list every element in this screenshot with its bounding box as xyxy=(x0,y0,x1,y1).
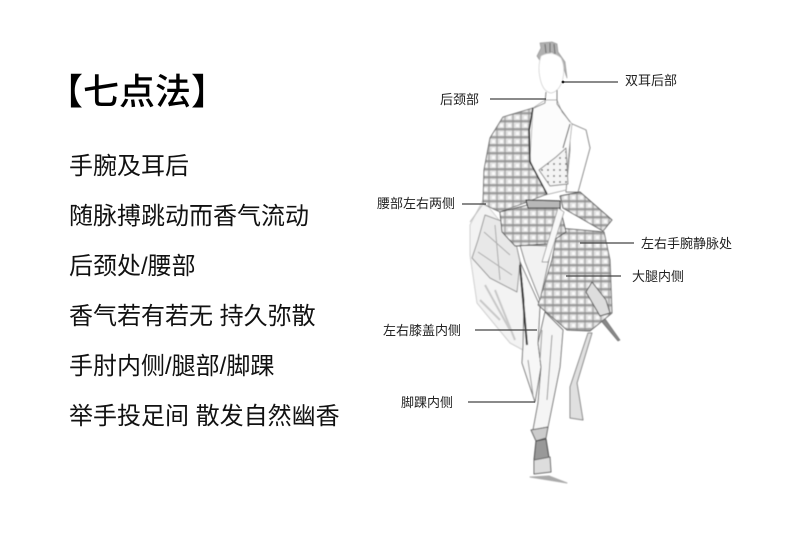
text line 5: 手肘内侧/腿部/脚踝 xyxy=(69,353,274,380)
neck xyxy=(534,90,570,122)
text line 4: 香气若有若无 持久弥散 xyxy=(69,303,316,330)
label: wrist veins: 左右手腕静脉处 xyxy=(641,236,732,251)
dotted top xyxy=(539,148,568,186)
boot xyxy=(531,427,548,441)
label: inner ankle xyxy=(401,395,535,410)
bare right arm xyxy=(566,123,590,192)
sole xyxy=(530,476,567,483)
label: behind both ears: 双耳后部 xyxy=(625,73,677,88)
text line 6: 举手投足间 散发自然幽香 xyxy=(69,403,340,430)
right sash xyxy=(560,192,612,231)
sheer drape folds xyxy=(480,285,515,340)
waist fold xyxy=(500,205,566,246)
belt tail xyxy=(597,313,620,341)
torso xyxy=(530,100,572,195)
text line 1: 手腕及耳后 xyxy=(69,153,189,180)
hanging strap xyxy=(570,333,592,420)
sheer left drape xyxy=(470,200,530,350)
white belt strip xyxy=(542,208,564,262)
legs xyxy=(520,262,541,402)
plaid skirt drape xyxy=(538,228,612,331)
ruffle xyxy=(472,215,520,292)
belt xyxy=(526,200,560,208)
plaid shawl xyxy=(483,108,547,212)
skirt centre panel xyxy=(520,245,552,300)
sheer sleeve edge xyxy=(470,204,483,222)
label: inner thigh xyxy=(566,269,684,284)
title: 【七点法】 xyxy=(47,71,227,112)
label: inner knees: 左右膝盖内侧 xyxy=(383,323,461,338)
label: both sides of waist: 腰部左右两侧 xyxy=(377,196,455,211)
ruffle folds xyxy=(478,225,512,280)
label: back of neck: 后颈部 xyxy=(440,92,479,107)
text block: seven-point method list xyxy=(69,153,340,430)
face xyxy=(539,53,564,93)
text line 2: 随脉搏跳动而香气流动 xyxy=(69,203,309,230)
label: inner thigh: 大腿内侧 xyxy=(632,269,684,284)
hair strands xyxy=(545,43,555,54)
label: behind both ears xyxy=(562,73,677,88)
text line 3: 后颈处/腰部 xyxy=(69,253,196,280)
hair xyxy=(537,42,567,78)
figure illustration xyxy=(470,42,620,483)
label: back of neck xyxy=(440,92,546,107)
label: inner ankle: 脚踝内侧 xyxy=(401,395,453,410)
